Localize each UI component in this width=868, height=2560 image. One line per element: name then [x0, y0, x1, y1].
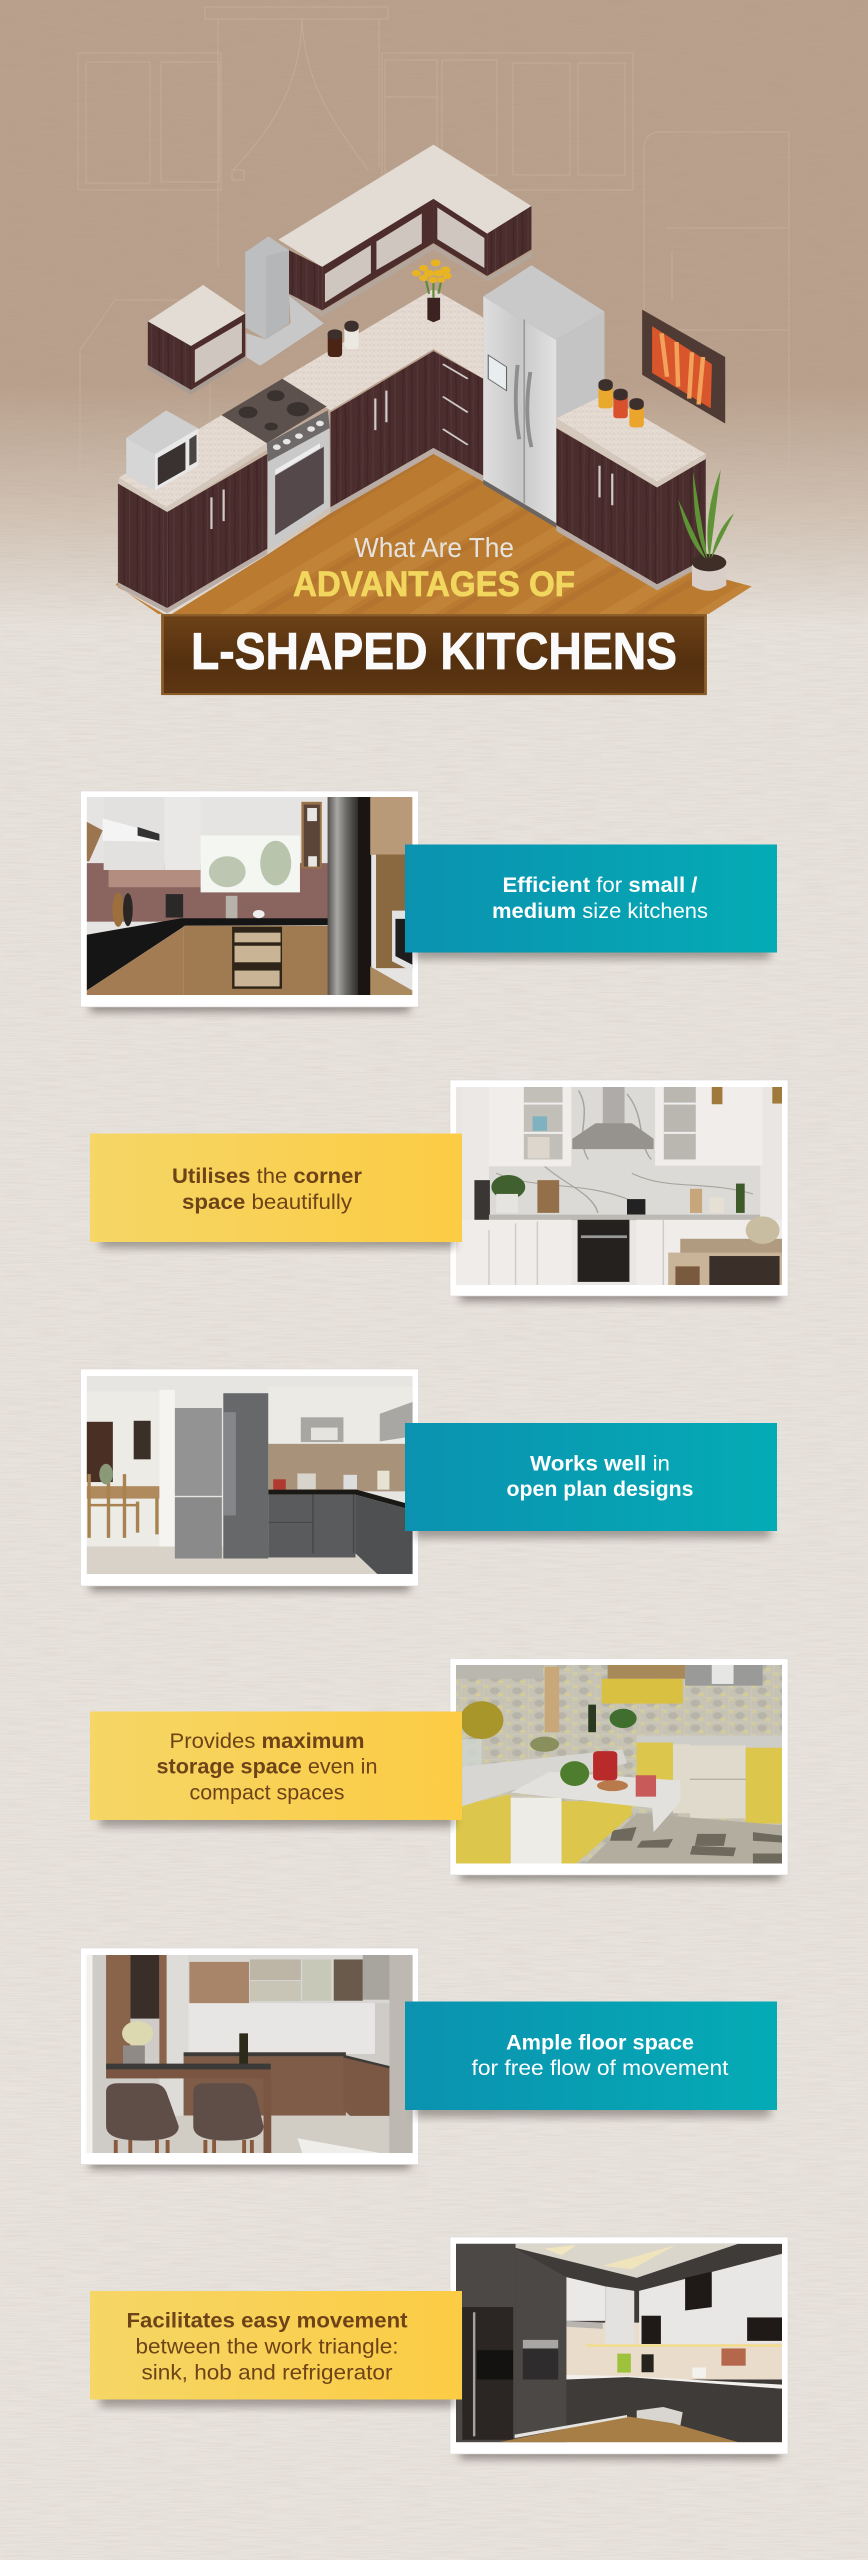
title line: l-shaped kitchens: L-SHAPED KITCHENS [191, 623, 677, 681]
small wall cabinet [148, 285, 245, 395]
floor [172, 454, 752, 614]
callout: floor space [405, 2002, 777, 2117]
callout: easy movement: Facilitates easy movement [126, 2308, 408, 2332]
photo frame 5 [80, 1948, 418, 2169]
framed wall art [642, 310, 725, 423]
title line: advantages of: ADVANTAGES OF [293, 565, 575, 604]
upper corner cabinets [278, 145, 531, 310]
callout: floor space: for free flow of movement [472, 2056, 729, 2080]
potted plant [678, 470, 734, 591]
callout: storage: storage space even in [156, 1754, 378, 1778]
photo frame 3 [80, 1369, 418, 1591]
panel: storage [90, 1658, 788, 1880]
left counter [118, 415, 267, 512]
title line: what are the: What Are The [354, 532, 514, 563]
callout: open plan: Works well in [530, 1452, 670, 1476]
callout: easy movement: between the work triangle: [136, 2334, 398, 2358]
callout: storage [90, 1712, 462, 1827]
panel: floor space [80, 1948, 777, 2169]
hero kitchen illustration [116, 144, 752, 696]
range hood [245, 236, 324, 366]
right counter and cabinet [556, 395, 706, 590]
photo frame 2 [450, 1080, 788, 1301]
panel: easy movement [90, 2237, 788, 2459]
microwave [126, 410, 198, 491]
callout: open plan: open plan designs [506, 1477, 694, 1501]
panel: open plan [80, 1369, 777, 1591]
spice jars [598, 379, 644, 427]
photo frame 1 [80, 791, 418, 1012]
callout: efficient: medium size kitchens [492, 899, 708, 923]
panel: efficient [80, 791, 777, 1012]
stove [221, 379, 330, 551]
main counter [282, 289, 483, 410]
faint kitchen line drawing [78, 7, 789, 480]
callout: easy movement [90, 2291, 462, 2407]
callout: easy movement: sink, hob and refrigerator [142, 2360, 392, 2384]
refrigerator [483, 265, 604, 528]
callout: storage: compact spaces [190, 1780, 344, 1804]
left base cabinet [116, 454, 267, 614]
callout: open plan [405, 1423, 777, 1538]
callout: corner space: Utilises the corner [172, 1164, 363, 1188]
counter jars [328, 321, 359, 357]
callout: efficient [405, 844, 777, 959]
panel: corner space [90, 1080, 788, 1301]
flower vase [412, 259, 452, 322]
callout: floor space: Ample floor space [506, 2030, 694, 2054]
middle cabinets [330, 351, 483, 513]
wall cabinet shadow [289, 244, 531, 317]
photo frame 4 [450, 1658, 788, 1880]
callout: storage: Provides maximum [170, 1729, 364, 1753]
callout: corner space [90, 1134, 462, 1248]
callout: efficient: Efficient for small / [502, 873, 698, 897]
callout: corner space: space beautifully [182, 1190, 352, 1214]
photo frame 6 [450, 2237, 788, 2459]
banner plaque [161, 614, 707, 695]
title [191, 532, 677, 681]
